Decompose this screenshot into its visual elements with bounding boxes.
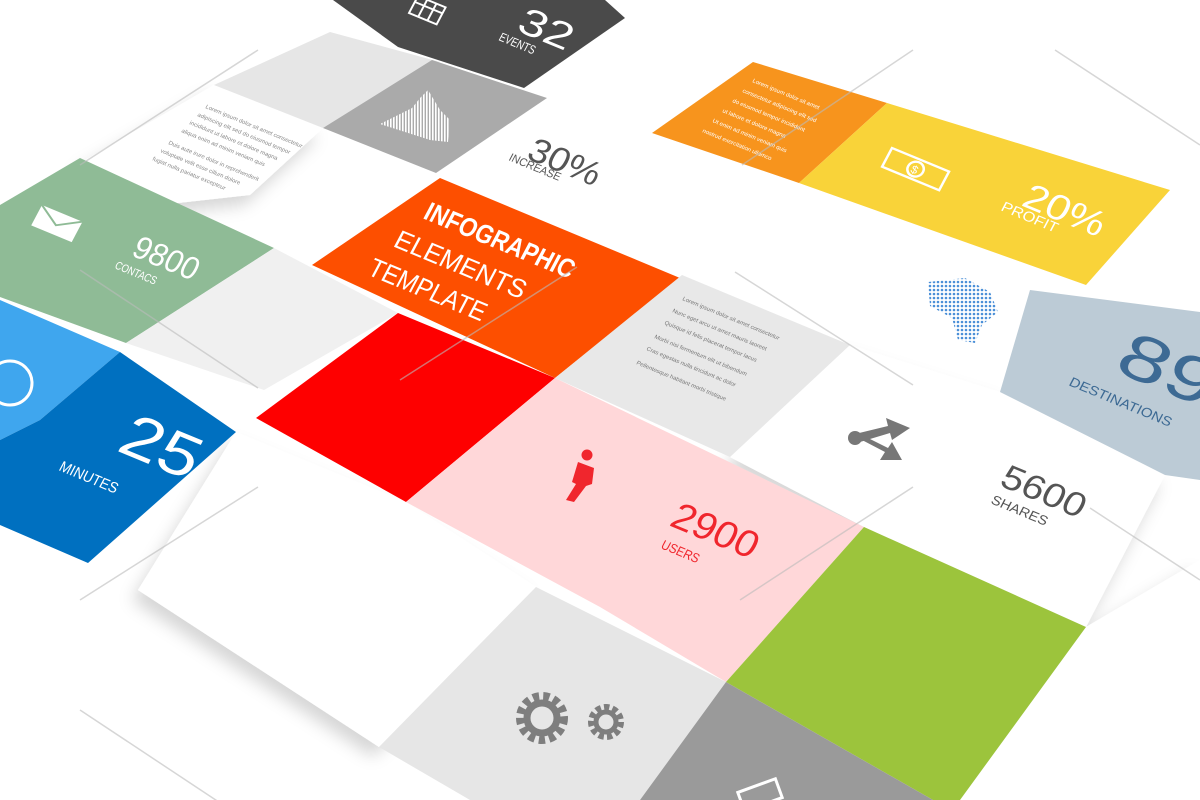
text block: lorem ipsum left: Duis aute irure dolor in reprehenderit <box>167 141 260 183</box>
title text: ELEMENTS <box>389 224 532 304</box>
tile: red <box>256 313 555 502</box>
tile: light blue clock <box>0 300 120 440</box>
tile: light gray text: Morbi nisi fermentum elit ut bibendum <box>653 335 748 378</box>
stat: 9800 contacs: CONTACS <box>113 259 159 287</box>
tile: orange text: nostrud exercitation ullamco <box>701 129 773 162</box>
tile: orange-red title <box>312 178 680 378</box>
icon: gears <box>521 697 620 739</box>
tile: pink users <box>406 378 864 682</box>
stat: 5600 shares: SHARES <box>989 493 1051 528</box>
icon: money: $ <box>908 163 921 177</box>
tile: light gray text: Nunc eget arcu ut amet mauris laoreet <box>671 309 768 353</box>
tile: lime green <box>726 527 1086 800</box>
title text: TEMPLATE <box>363 252 492 327</box>
title text <box>363 196 581 327</box>
stat: 32 events <box>497 0 581 59</box>
text block: lorem ipsum left <box>151 105 303 192</box>
tile: orange text: consectetur adipiscing elit sed <box>741 89 817 124</box>
tile: blue-gray destinations <box>1000 290 1200 480</box>
stat: 20% profit: PROFIT <box>998 200 1061 236</box>
tile: light gray top <box>214 32 440 128</box>
stat: 20% profit: 20% <box>1016 175 1114 244</box>
tile: orange text: Lorem ipsum dolor sit amet <box>751 79 821 111</box>
icon: person <box>566 450 594 502</box>
tile: orange text: ut labore et dolore magna <box>721 109 787 140</box>
icon: money <box>882 148 949 190</box>
tile: dark blue minutes <box>0 352 236 563</box>
text block: lorem ipsum left: incididunt ut labore et dolore magna <box>188 121 279 162</box>
text block: lorem ipsum left: Lorem ipsum dolor sit amet consectetur <box>204 105 303 150</box>
stat: 32 events: EVENTS <box>497 30 538 57</box>
stat: 89 destinations <box>1067 319 1200 429</box>
tile: light gray gears <box>379 587 726 800</box>
stat: 5600 shares: 5600 <box>994 458 1093 525</box>
text block: lorem ipsum left: aliqua enim ad minim veniam quis <box>180 129 266 168</box>
stat: 89 destinations: DESTINATIONS <box>1067 375 1175 429</box>
tile: orange text: do eiusmod tempor incididunt <box>731 99 806 134</box>
stat: 25 minutes: MINUTES <box>56 459 121 497</box>
tile: light gray text: Lorem ipsum dolor sit amet consectetur <box>681 297 780 342</box>
tile: light gray text: Cras egestas nulla tincidunt ac dolor <box>645 347 737 388</box>
icon: envelope <box>31 205 82 242</box>
title text: INFOGRAPHIC <box>419 196 581 284</box>
tile: dark gray bottom <box>640 682 933 800</box>
tile: yellow profit <box>799 103 1170 285</box>
stat: 2900 users: USERS <box>659 538 702 566</box>
stat: 32 events: 32 <box>511 0 581 59</box>
icon: calendar <box>409 0 446 24</box>
tile: orange text: Ut enim ad minim veniam quis <box>711 119 788 154</box>
tile: light gray middle <box>126 248 398 390</box>
stat: 25 minutes <box>56 401 214 497</box>
tile: dark gray events <box>333 0 625 88</box>
tile: light gray text: Pellentesque habitant morbi tristique <box>635 361 727 403</box>
tile: green contacts <box>0 158 274 343</box>
tile: light gray text <box>555 275 850 457</box>
tile: chart gray <box>323 60 547 173</box>
icon: clock <box>0 361 32 405</box>
icon: africa map <box>928 278 998 343</box>
stat: 30% increase: 30% <box>521 131 608 193</box>
stat: 9800 contacs: 9800 <box>126 230 206 288</box>
stat: 25 minutes: 25 <box>109 401 214 493</box>
tile: light gray text: Quisque id felis placerat tempor lacus <box>663 321 758 364</box>
icon: share arrows <box>848 418 910 460</box>
text block: lorem ipsum left: fugiat nulla pariatur excepteur <box>151 157 226 192</box>
stat: 2900 users: 2900 <box>664 495 766 567</box>
text block: lorem ipsum left: adipiscing elit sed do eiusmod tempor <box>196 113 291 156</box>
text block: lorem ipsum left: voluptate velit esse cillum dolore <box>159 149 241 186</box>
stat: 30% increase: INCREASE <box>507 151 563 184</box>
tile: orange text <box>652 62 887 183</box>
icon: bar chart mountain <box>380 90 450 142</box>
